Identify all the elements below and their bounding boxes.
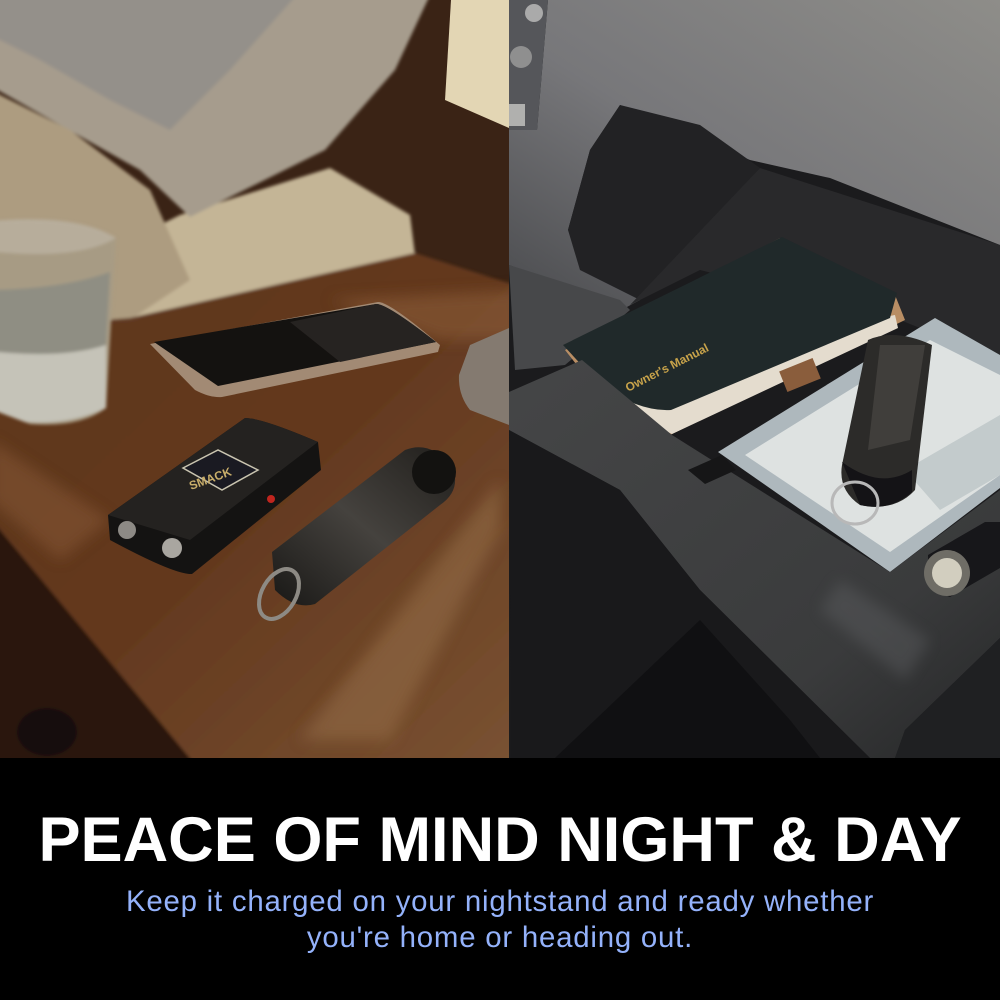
door latch — [688, 455, 736, 484]
keychain tube — [251, 447, 456, 626]
photo panels: nightstand and glove box — [0, 0, 1000, 758]
blanket — [0, 85, 190, 330]
caption band — [0, 758, 1000, 1000]
glove box door — [509, 360, 1000, 758]
device label — [183, 450, 258, 490]
glove box interior — [630, 168, 1000, 360]
lamp base — [459, 328, 509, 425]
wood grain highlights — [0, 290, 520, 740]
bed mattress — [110, 168, 415, 320]
document sleeve — [718, 318, 1000, 572]
vent recess — [568, 105, 760, 300]
keychain tube — [832, 335, 932, 524]
table top — [0, 253, 530, 780]
owner's manual: Owner's Manual — [623, 341, 711, 395]
panel: glove box photo — [509, 0, 1000, 758]
floor mat — [555, 620, 820, 758]
center console — [509, 0, 548, 130]
subtitle: you're home or heading out. — [307, 921, 693, 954]
stun device: SMACK — [187, 465, 234, 493]
stun device — [108, 418, 321, 574]
water glass — [0, 219, 116, 425]
subtitle — [126, 885, 874, 954]
lamp shade — [445, 0, 509, 128]
subtitle: Keep it charged on your nightstand and ready whether — [126, 885, 874, 918]
door scuff marks — [820, 580, 930, 680]
flashlight — [924, 522, 1000, 597]
owner's manual — [563, 237, 905, 435]
title: PEACE OF MIND NIGHT & DAY — [38, 805, 962, 875]
panel: nightstand photo — [0, 0, 530, 780]
smartphone — [150, 302, 440, 397]
dashboard — [509, 0, 1000, 308]
drawer knob — [17, 708, 77, 756]
pillow — [0, 0, 437, 217]
